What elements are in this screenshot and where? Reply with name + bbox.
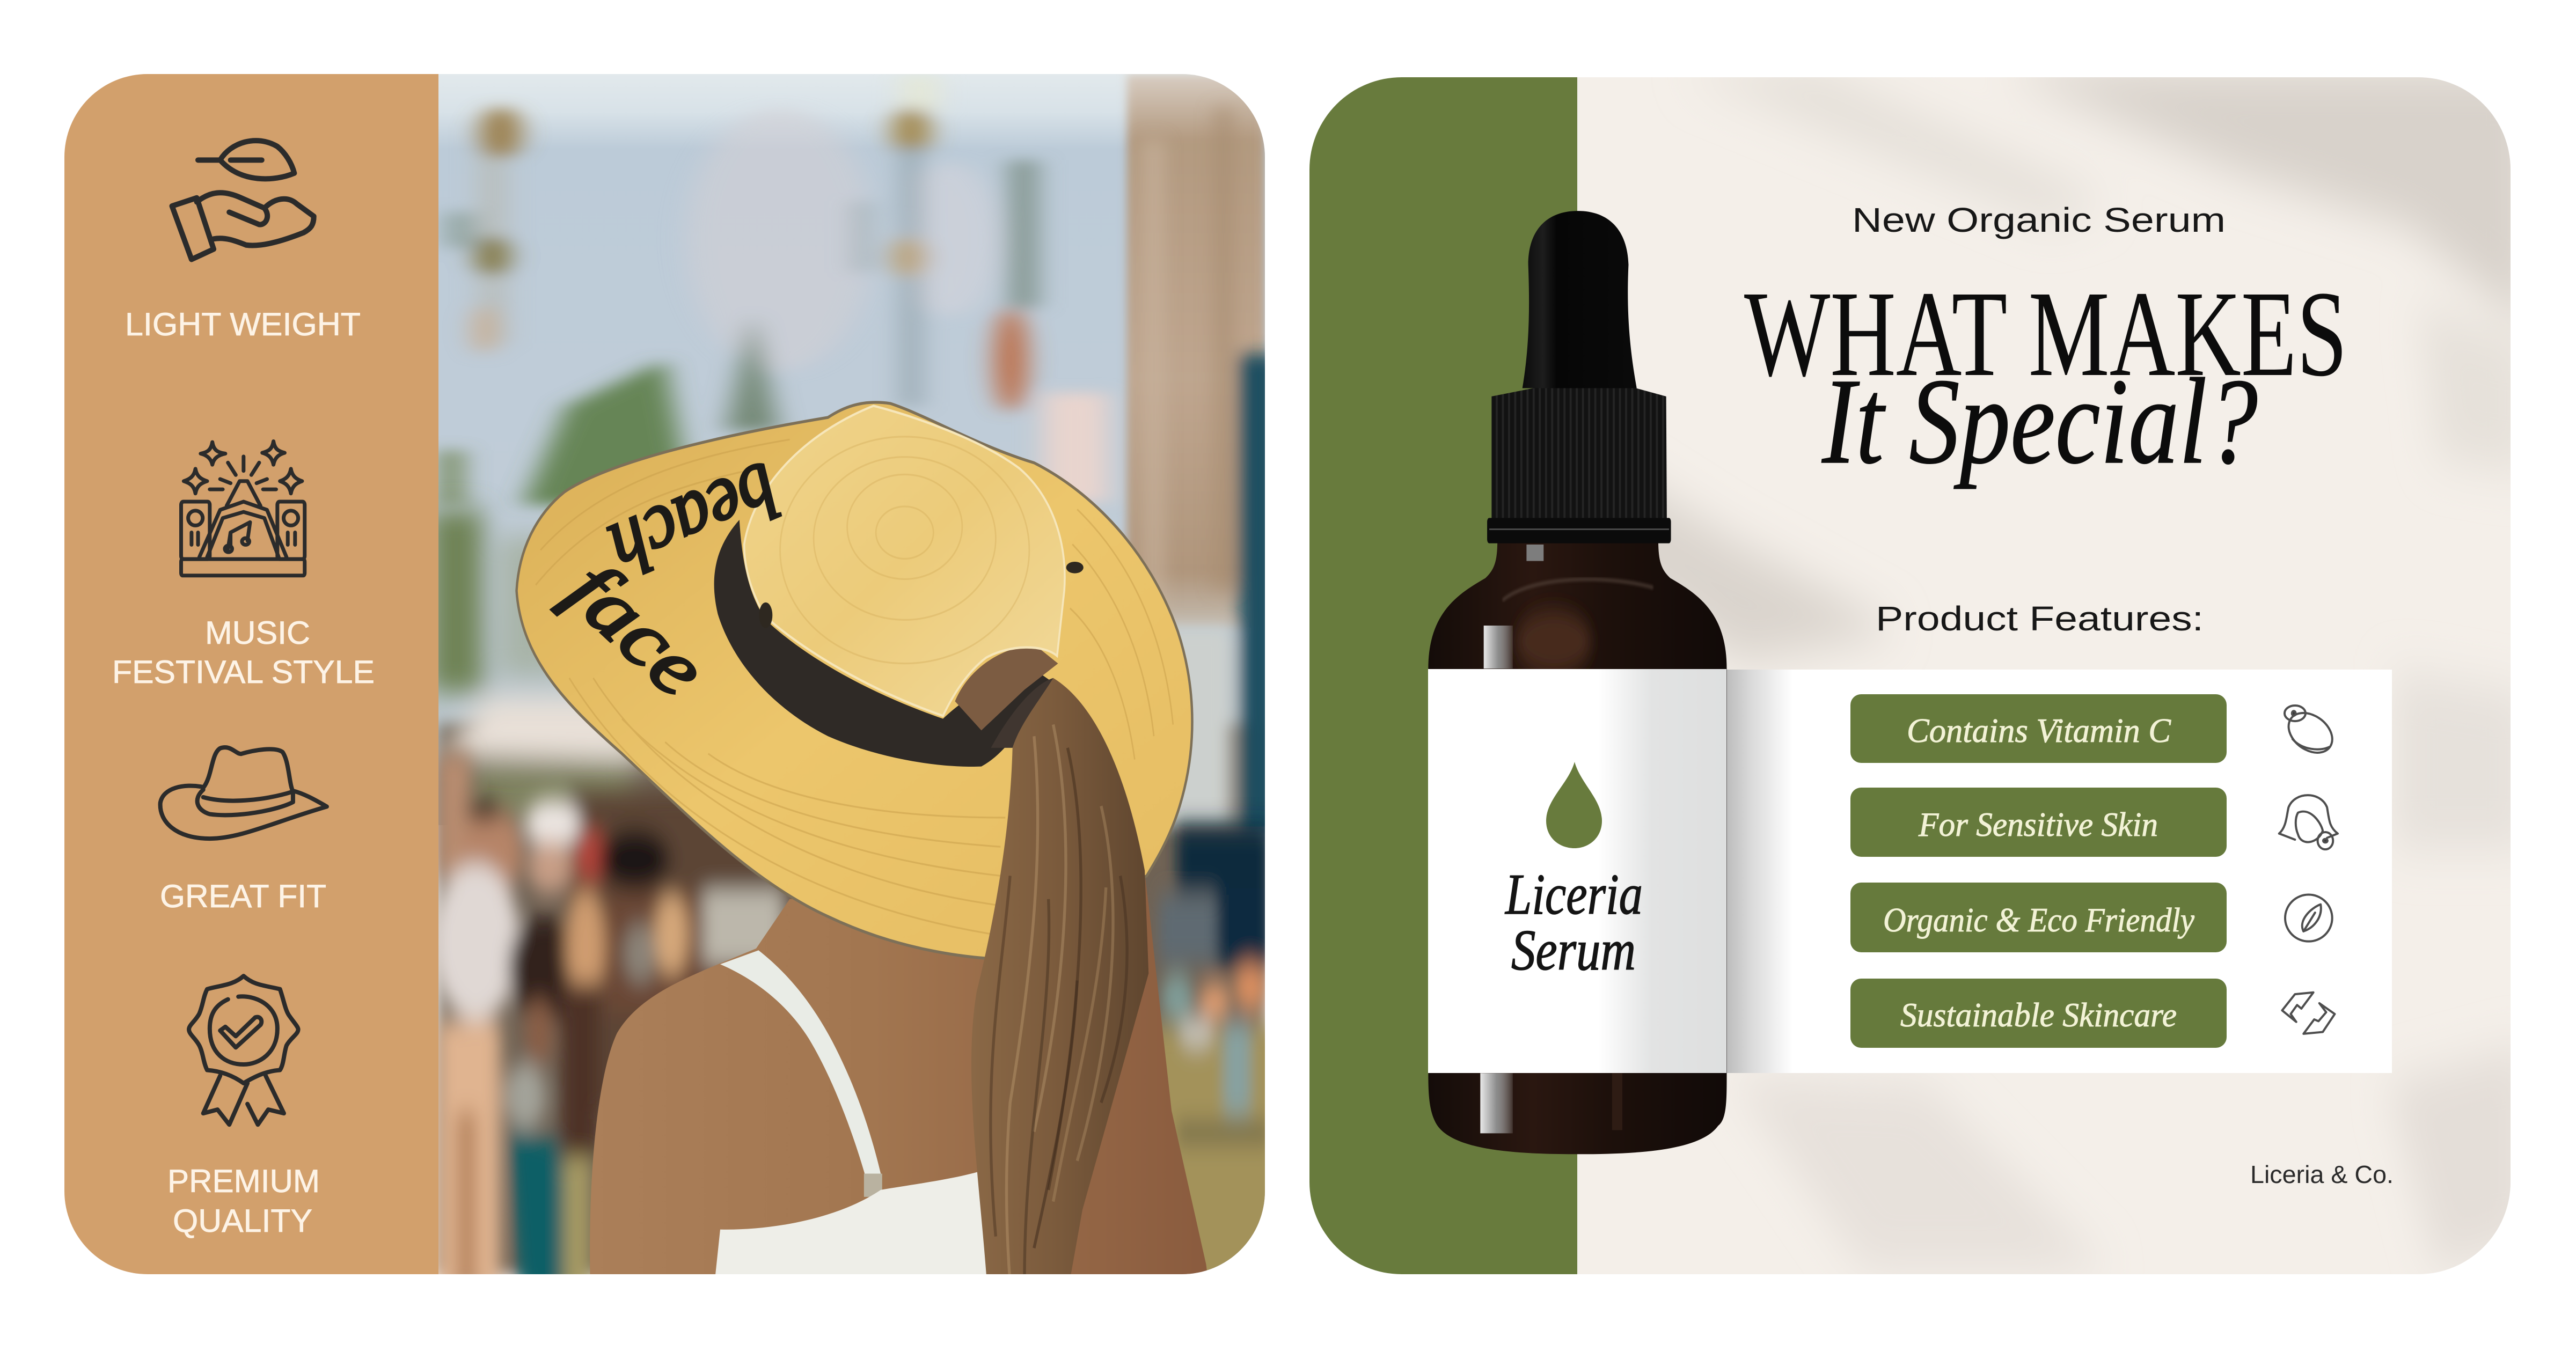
icon: leaf over open hand (172, 141, 314, 260)
headline: It Special? (1821, 353, 2258, 489)
hair: strands (991, 725, 1127, 1283)
label: music festival style: FESTIVAL STYLE (112, 654, 375, 690)
illustration: woman seen from behind (517, 402, 1211, 1306)
label: premium quality: QUALITY (173, 1203, 312, 1239)
dropper rubber bulb (1523, 211, 1637, 388)
subheading: Product Features: (1876, 599, 2204, 638)
brand name on label (1504, 863, 1643, 982)
garment: strap slider (864, 1174, 882, 1197)
bottle label (1428, 669, 1726, 1073)
eyebrow text: New Organic Serum (1852, 201, 2226, 239)
feature pill: organic: Organic & Eco Friendly (1883, 901, 2195, 939)
background: cream panel (1577, 77, 2511, 1274)
bottle glass body (1428, 540, 1727, 1154)
hat: crown (744, 406, 1065, 716)
feature pill: sensitive skin (1850, 788, 2227, 857)
hat: crown weave rings (780, 437, 1029, 664)
icon: green droplet (1546, 762, 1602, 848)
ribbon tie around ponytail (991, 678, 1053, 748)
ribbed collar (1491, 388, 1667, 521)
garment: white top (712, 1168, 1020, 1306)
feature pill: vitamin c: Contains Vitamin C (1907, 711, 2171, 750)
label: music festival style (112, 615, 375, 690)
icon: recycle arrows (2282, 993, 2334, 1034)
glass reflections (1480, 527, 1653, 1133)
brand name on label: Liceria (1504, 863, 1643, 927)
illustration: amber dropper bottle (1428, 211, 1727, 1154)
icon: brimmed hat (160, 747, 327, 839)
icon: lemon (2284, 706, 2337, 760)
headline (1744, 266, 2347, 489)
hat: black ribbon band (714, 520, 1051, 767)
label: premium quality (167, 1163, 320, 1239)
feature pill: sensitive skin: For Sensitive Skin (1918, 805, 2158, 843)
panel: straw hat photo card (64, 74, 1277, 1306)
hat embroidery: first word: beach (597, 445, 793, 595)
headline: WHAT MAKES (1744, 266, 2347, 402)
feature pill: organic (1850, 883, 2227, 952)
background: green strip (1309, 77, 1577, 1274)
feature pill: vitamin c (1850, 694, 2227, 763)
label: premium quality: PREMIUM (167, 1163, 320, 1199)
hair: gathered at opening (955, 644, 1058, 730)
background: soft window shadows (1581, 70, 2530, 1271)
icon: quality badge with ribbon (189, 976, 298, 1125)
sidebar: tan feature column (64, 74, 438, 1274)
panel: serum product card (1309, 70, 2530, 1274)
photo: blurred festival sky and background (429, 74, 1277, 1299)
brand name on label: Serum (1511, 919, 1636, 982)
label: light weight: LIGHT WEIGHT (125, 306, 361, 342)
garment: white strap (720, 950, 881, 1190)
footer brand: Liceria & Co. (2250, 1160, 2394, 1188)
icon: face with hair (2279, 795, 2338, 849)
hat: straw rings (536, 439, 1173, 934)
skin: shoulders and back (590, 870, 1211, 1306)
hair: ponytail (971, 678, 1148, 1306)
label: great fit: GREAT FIT (160, 878, 326, 914)
collar ring (1487, 518, 1671, 543)
icon: leaf in circle (2285, 895, 2332, 942)
hat embroidery: second word: face (550, 545, 723, 714)
label: music festival style: MUSIC (205, 615, 310, 651)
icon: music festival stage (181, 442, 305, 576)
hat: side vent holes (759, 562, 1084, 628)
panel: white feature strip (1726, 670, 2392, 1073)
hat: wide straw brim (517, 402, 1192, 960)
feature pill: sustainable: Sustainable Skincare (1900, 996, 2177, 1034)
feature pill: sustainable (1850, 979, 2227, 1048)
